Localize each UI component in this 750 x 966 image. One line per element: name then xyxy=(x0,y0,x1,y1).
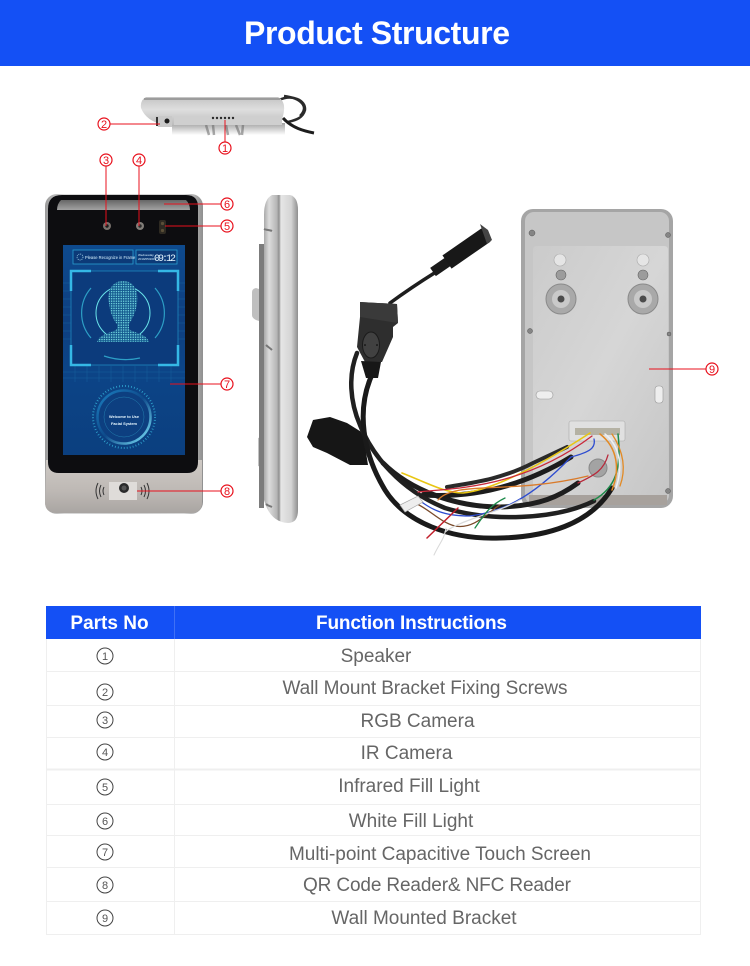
callout leader lines xyxy=(106,120,706,491)
row 2: Wall Mount Bracket Fixing Screws xyxy=(282,678,568,699)
row 5 xyxy=(97,776,480,797)
callout 2: 2 xyxy=(101,119,107,131)
product photo: front view of terminal xyxy=(45,194,203,514)
callout 7 xyxy=(221,378,233,391)
touch screen xyxy=(63,245,185,455)
callout 6: 6 xyxy=(224,199,230,211)
row 9: Wall Mounted Bracket xyxy=(331,908,517,929)
USB connector xyxy=(357,302,398,378)
white fill light xyxy=(57,200,190,210)
title: Product Structure xyxy=(244,15,510,51)
row 8 xyxy=(97,875,572,896)
IR camera xyxy=(136,222,144,230)
clock box: 09:12 xyxy=(154,254,176,265)
row 7: Multi-point Capacitive Touch Screen xyxy=(289,844,591,865)
callout 8: 8 xyxy=(224,486,230,498)
callout 1: 1 xyxy=(222,143,228,155)
product photo: bottom edge view xyxy=(141,96,314,135)
row 3: 3 xyxy=(102,715,108,727)
coloured wires xyxy=(402,433,623,555)
clock box xyxy=(136,250,177,265)
callout 5 xyxy=(221,220,233,233)
callout 1 xyxy=(219,142,231,155)
grid lines xyxy=(63,283,185,382)
row 6: White Fill Light xyxy=(349,811,474,832)
row 1 xyxy=(97,646,412,667)
row 2: 2 xyxy=(102,687,108,699)
table header xyxy=(46,606,701,639)
keyhole mounts xyxy=(546,254,658,314)
prompt box: Please Recognize in Frame xyxy=(85,255,136,260)
connector window xyxy=(569,421,625,477)
callout 4: 4 xyxy=(136,155,142,167)
row 9: 9 xyxy=(102,913,108,925)
power jack with lead xyxy=(390,224,492,303)
table header: Function Instructions xyxy=(316,613,507,634)
row 4 xyxy=(97,743,453,764)
face scan xyxy=(97,281,149,342)
header banner xyxy=(0,0,750,66)
row 2 xyxy=(97,678,568,700)
welcome ring xyxy=(93,386,155,448)
metal chin xyxy=(45,460,202,513)
table header: Parts No xyxy=(70,613,149,634)
row 4: 4 xyxy=(102,747,108,759)
callout 2 xyxy=(98,118,110,131)
callout 3: 3 xyxy=(103,155,109,167)
row 6: 6 xyxy=(102,816,108,828)
product photo: wall mounted bracket xyxy=(521,209,673,508)
row 1: 1 xyxy=(102,651,108,663)
slots xyxy=(536,391,553,399)
black glass xyxy=(48,195,198,473)
parts table xyxy=(46,606,701,934)
black cables xyxy=(383,463,578,507)
QR and NFC reader xyxy=(96,482,149,500)
row 5: 5 xyxy=(102,782,108,794)
row 8: 8 xyxy=(102,880,108,892)
row 7: 7 xyxy=(102,847,108,859)
row 3 xyxy=(97,711,475,732)
product photo: side view of terminal xyxy=(252,195,298,523)
row 9 xyxy=(97,908,517,929)
infrared fill light xyxy=(159,220,166,234)
clock box: Wednesday xyxy=(138,253,154,257)
row 3: RGB Camera xyxy=(360,711,475,732)
callout 8 xyxy=(221,485,233,498)
face frame xyxy=(71,271,178,365)
callout 9: 9 xyxy=(709,364,715,376)
welcome ring: Facial System xyxy=(111,421,138,426)
row 7 xyxy=(97,844,591,865)
RJ45 connector xyxy=(307,417,368,465)
callout 9 xyxy=(706,363,718,376)
callout markers xyxy=(98,118,718,498)
screws xyxy=(528,230,671,494)
row 4: IR Camera xyxy=(361,743,453,764)
prompt box xyxy=(73,250,136,264)
callout 5: 5 xyxy=(224,221,230,233)
RGB camera xyxy=(103,222,111,230)
row 6 xyxy=(97,811,474,832)
white terminal plug xyxy=(400,496,423,512)
callout 6 xyxy=(221,198,233,211)
row 1: Speaker xyxy=(341,646,412,667)
welcome ring: Welcome to Use xyxy=(109,414,140,419)
callout 4 xyxy=(133,154,145,167)
product photo: cable harness xyxy=(307,224,623,555)
row 8: QR Code Reader& NFC Reader xyxy=(303,875,572,896)
row 5: Infrared Fill Light xyxy=(338,776,480,797)
callout 7: 7 xyxy=(224,379,230,391)
clock box: 2019/05/2019 xyxy=(138,257,157,261)
callout 3 xyxy=(100,154,112,167)
